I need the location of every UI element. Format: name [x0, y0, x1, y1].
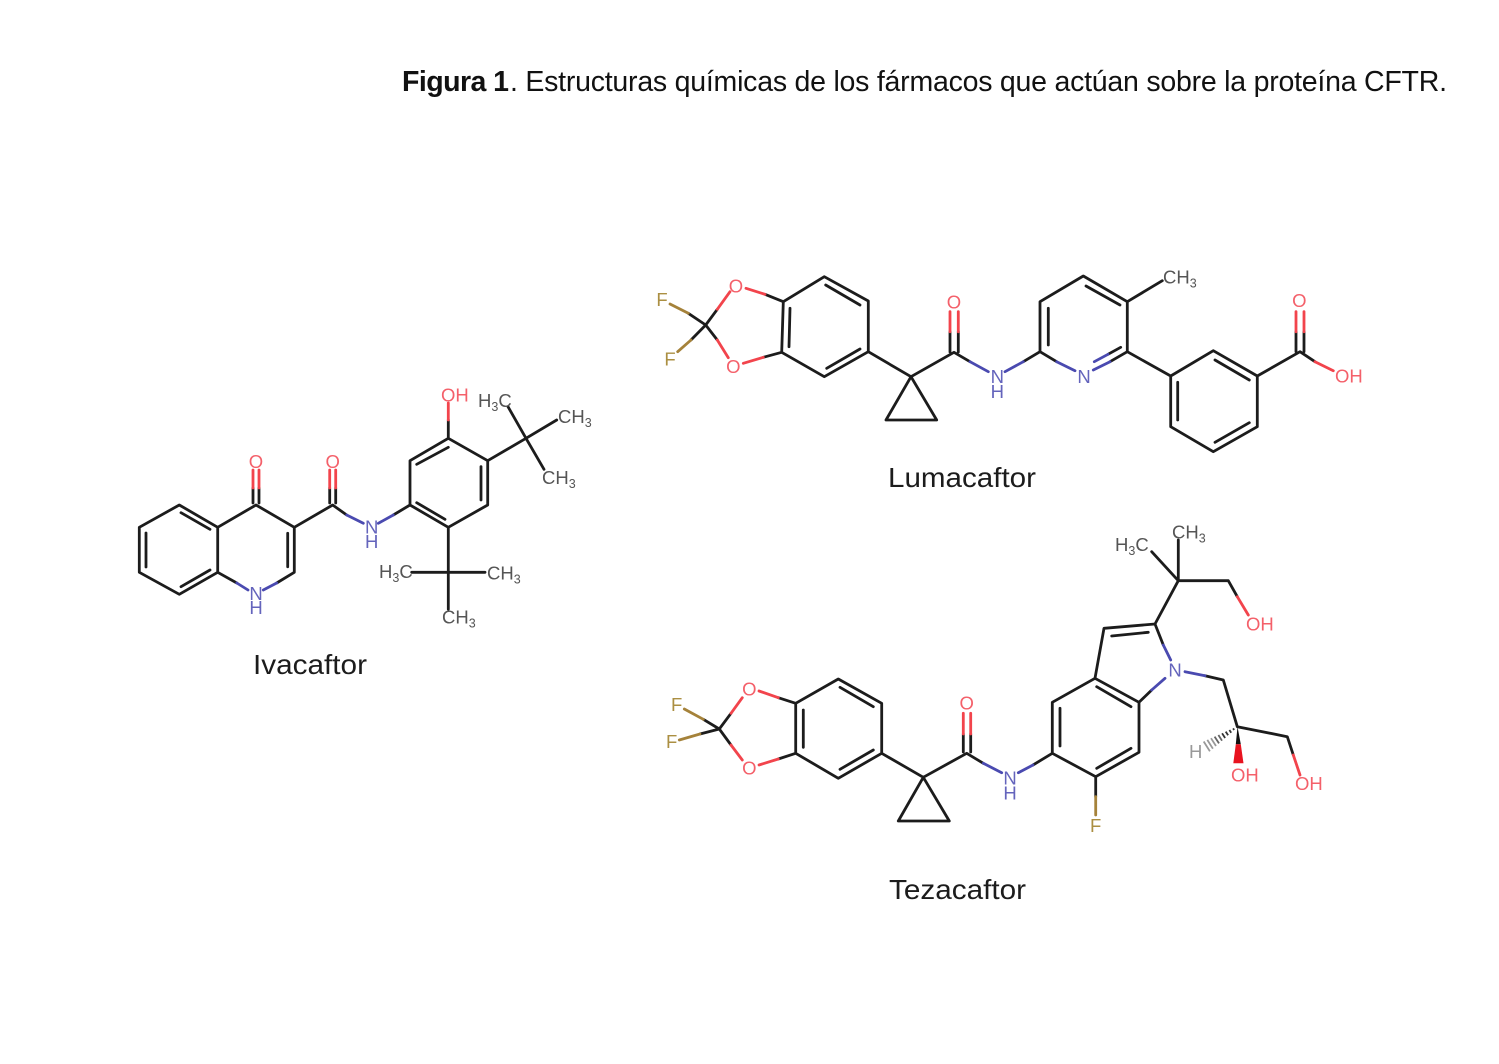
Tezacaftor atom labels: C: [1135, 534, 1149, 555]
Ivacaftor atom labels: CH: [558, 406, 585, 427]
Tezacaftor atom labels: N: [1003, 768, 1017, 788]
Lumacaftor atom labels: N: [1077, 366, 1091, 387]
Lumacaftor atom labels: 3: [1190, 276, 1197, 290]
Ivacaftor atom labels: N: [249, 583, 263, 604]
Ivacaftor atom labels: 3: [514, 572, 521, 586]
molecule: Tezacaftor: [666, 522, 1323, 905]
Ivacaftor atom labels: CH: [542, 467, 569, 488]
Tezacaftor atom labels: O: [960, 692, 974, 714]
Ivacaftor atom labels: H: [478, 390, 491, 411]
Lumacaftor atom labels: O: [1292, 290, 1306, 311]
Ivacaftor atom labels: O: [249, 451, 263, 472]
Tezacaftor atom labels: CH: [1172, 522, 1199, 542]
Ivacaftor atom labels: CH: [442, 606, 469, 628]
Lumacaftor bonds: [670, 276, 1333, 452]
Tezacaftor atom labels: OH: [1246, 614, 1274, 635]
Lumacaftor atom labels: O: [729, 276, 743, 296]
Tezacaftor atom labels: O: [742, 758, 756, 778]
Ivacaftor atom labels: 3: [392, 571, 399, 585]
Lumacaftor atom labels: F: [656, 289, 668, 310]
Ivacaftor bonds: [139, 403, 557, 609]
Ivacaftor atom labels: [249, 384, 592, 630]
Tezacaftor bonds: [679, 540, 1300, 821]
Ivacaftor name: Ivacaftor: [253, 649, 367, 680]
Lumacaftor atom labels: N: [991, 366, 1004, 387]
Ivacaftor atom labels: H: [379, 561, 392, 582]
Ivacaftor atom labels: OH: [441, 384, 469, 406]
Tezacaftor atom labels: OH: [1231, 765, 1259, 786]
Lumacaftor name: Lumacaftor: [888, 462, 1036, 493]
Ivacaftor atom labels: CH: [487, 562, 514, 584]
stereo wedge bond: [1233, 727, 1244, 763]
Tezacaftor atom labels: 3: [1199, 532, 1206, 546]
title: Figura 1 caption: . Estructuras químicas de los fármacos que actúan sobre la proteína CFTR.: [510, 66, 1447, 98]
Ivacaftor atom labels: N: [365, 516, 378, 537]
Tezacaftor atom labels: OH: [1295, 773, 1323, 794]
Lumacaftor atom labels: O: [947, 292, 961, 312]
Lumacaftor atom labels: OH: [1335, 366, 1363, 387]
molecule: Ivacaftor: [139, 384, 592, 680]
Tezacaftor atom labels: F: [666, 731, 677, 752]
Ivacaftor atom labels: C: [399, 561, 413, 582]
Tezacaftor atom labels: H: [1003, 782, 1017, 804]
Ivacaftor atom labels: 3: [585, 416, 592, 430]
Tezacaftor atom labels: N: [1168, 660, 1182, 681]
Lumacaftor atom labels: O: [726, 356, 740, 377]
Tezacaftor atom labels: 3: [1128, 544, 1135, 558]
Ivacaftor atom labels: 3: [491, 400, 498, 414]
Tezacaftor atom labels: H: [1189, 741, 1202, 762]
Ivacaftor atom labels: C: [498, 390, 512, 411]
Ivacaftor atom labels: H: [365, 531, 378, 552]
stereo hashed bond: [1204, 728, 1234, 751]
Lumacaftor atom labels: [656, 266, 1363, 402]
molecule: Lumacaftor: [656, 266, 1363, 493]
Ivacaftor atom labels: H: [249, 597, 263, 618]
Tezacaftor atom labels: F: [671, 694, 682, 715]
title: Figura 1 caption: Figura 1: [402, 66, 509, 98]
Tezacaftor atom labels: O: [742, 678, 756, 700]
Tezacaftor atom labels: F: [1090, 815, 1101, 836]
Lumacaftor atom labels: CH: [1163, 266, 1190, 288]
Ivacaftor atom labels: O: [326, 451, 340, 472]
Ivacaftor atom labels: 3: [569, 477, 576, 491]
Tezacaftor atom labels: H: [1115, 534, 1128, 555]
Ivacaftor atom labels: 3: [469, 616, 476, 630]
Tezacaftor atom labels: [666, 522, 1323, 836]
Lumacaftor atom labels: H: [991, 381, 1004, 402]
Lumacaftor atom labels: F: [664, 348, 676, 370]
Tezacaftor name: Tezacaftor: [889, 874, 1026, 905]
